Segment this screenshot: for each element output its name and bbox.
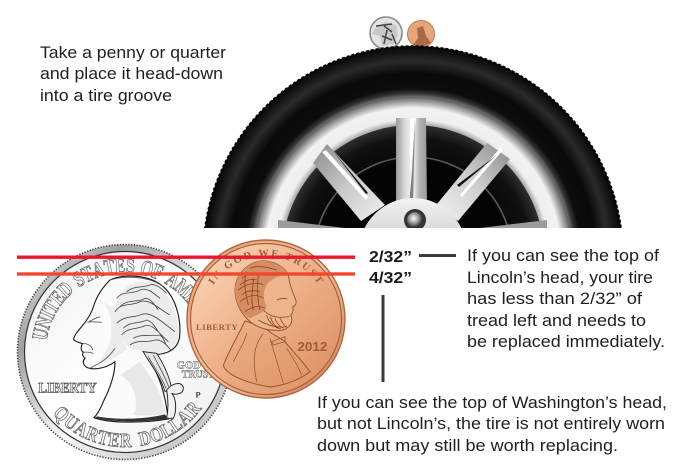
icon: small penny on tire bbox=[408, 20, 434, 48]
text block: Washington: but not Lincoln’s, the tire is not entirely worn bbox=[317, 415, 665, 433]
text: UNITED STATES OF AMERICA: E bbox=[179, 286, 204, 310]
tire and wheel bbox=[204, 45, 622, 228]
text block: Lincoln: be replaced immediately. bbox=[467, 333, 665, 351]
text: QUARTER DOLLAR bbox=[49, 397, 205, 451]
text: penny year: 2012 bbox=[297, 340, 327, 354]
red line: 4/32 inch bbox=[17, 272, 355, 276]
text block: Washington: If you can see the top of Washington’s head, bbox=[317, 394, 667, 412]
label: 2/32 inch: 2/32” bbox=[369, 249, 412, 266]
instruction text: and place it head-down bbox=[40, 65, 223, 83]
text: QUARTER DOLLAR: R bbox=[120, 429, 132, 451]
text: QUARTER DOLLAR: U bbox=[60, 410, 83, 435]
text: UNITED STATES OF AMERICA: E bbox=[46, 287, 71, 310]
text: UNITED STATES OF AMERICA: R bbox=[185, 296, 211, 318]
text block: Lincoln: tread left and needs to bbox=[467, 312, 646, 330]
reeded edge bbox=[18, 244, 232, 460]
connector: 4/32 to text bbox=[382, 295, 384, 382]
text block: Washington: down but may still be worth replacing. bbox=[317, 437, 618, 455]
icon: small quarter on tire bbox=[370, 17, 402, 49]
instruction text: into a tire groove bbox=[40, 87, 172, 105]
text: UNITED STATES OF AMERICA: A bbox=[161, 267, 184, 294]
text: UNITED STATES OF AMERICA: T bbox=[102, 255, 117, 281]
hair bow bbox=[167, 384, 183, 418]
text: UNITED STATES OF AMERICA: C bbox=[192, 314, 219, 333]
text: QUARTER DOLLAR: L bbox=[157, 418, 177, 442]
text: QUARTER DOLLAR: E bbox=[107, 428, 121, 451]
text: QUARTER DOLLAR: A bbox=[173, 405, 197, 430]
text: UNITED STATES OF AMERICA: I bbox=[190, 307, 214, 323]
text: UNITED STATES OF AMERICA: F bbox=[148, 260, 166, 286]
text: UNITED STATES OF AMERICA: T bbox=[78, 262, 98, 288]
text: UNITED STATES OF AMERICA: I bbox=[36, 306, 60, 323]
text: UNITED STATES OF AMERICA: S bbox=[69, 267, 89, 292]
text: UNITED STATES OF AMERICA: O bbox=[138, 256, 156, 282]
text: QUARTER DOLLAR: T bbox=[95, 426, 111, 450]
text: mint mark: P bbox=[195, 389, 201, 399]
text block: Lincoln: has less than 2/32” of bbox=[467, 290, 642, 308]
quarter coin bbox=[18, 244, 232, 460]
red line: 2/32 inch bbox=[17, 256, 355, 259]
label: 4/32 inch: 4/32” bbox=[369, 270, 412, 287]
text: QUARTER DOLLAR: D bbox=[137, 426, 153, 450]
instruction text bbox=[40, 44, 227, 105]
hub bbox=[364, 198, 462, 228]
text: UNITED STATES OF AMERICA: E bbox=[114, 254, 126, 279]
text block: Lincoln bbox=[467, 247, 665, 351]
text block: Lincoln: Lincoln’s head, your tire bbox=[467, 269, 653, 287]
text block: Washington bbox=[317, 394, 667, 455]
text: IN GOD WE TRUST: IN GOD WE TRUST bbox=[208, 249, 324, 285]
text: IN GOD WE TRUST: TRUST bbox=[182, 370, 215, 381]
icon: center bolt bbox=[404, 209, 426, 228]
connector: 2/32 to text bbox=[419, 254, 456, 257]
text: LIBERTY: LIBERTY bbox=[38, 380, 97, 396]
instruction text: Take a penny or quarter bbox=[40, 44, 227, 62]
text block: Lincoln: If you can see the top of bbox=[467, 247, 659, 265]
rim bbox=[256, 97, 570, 228]
text: UNITED STATES OF AMERICA: U bbox=[28, 326, 54, 342]
text: UNITED STATES OF AMERICA: M bbox=[169, 275, 196, 303]
text: UNITED STATES OF AMERICA: N bbox=[31, 313, 58, 332]
text: UNITED STATES OF AMERICA: T bbox=[39, 296, 65, 318]
text: IN GOD WE TRUST: GOD bbox=[177, 360, 201, 371]
spokes bbox=[278, 118, 547, 228]
text: UNITED STATES OF AMERICA: D bbox=[53, 277, 78, 303]
text: UNITED STATES OF AMERICA bbox=[28, 254, 222, 343]
text: UNITED STATES OF AMERICA: S bbox=[125, 254, 136, 279]
text: QUARTER DOLLAR: O bbox=[147, 422, 166, 447]
text: QUARTER DOLLAR: A bbox=[71, 417, 93, 442]
text: QUARTER DOLLAR: Q bbox=[49, 402, 74, 426]
text: IN GOD WE TRUST bbox=[177, 360, 215, 381]
text: QUARTER DOLLAR: R bbox=[181, 397, 205, 420]
wheel interior bbox=[286, 126, 540, 228]
portrait: Lincoln bbox=[223, 261, 310, 387]
text: QUARTER DOLLAR: L bbox=[165, 412, 186, 437]
text: UNITED STATES OF AMERICA: A bbox=[196, 327, 222, 343]
tire bbox=[204, 45, 622, 228]
text: penny LIBERTY: LIBERTY bbox=[196, 322, 238, 332]
portrait: Washington bbox=[74, 276, 183, 422]
text: UNITED STATES OF AMERICA: A bbox=[89, 257, 108, 284]
text: QUARTER DOLLAR: R bbox=[83, 422, 103, 447]
penny coin bbox=[186, 239, 346, 399]
